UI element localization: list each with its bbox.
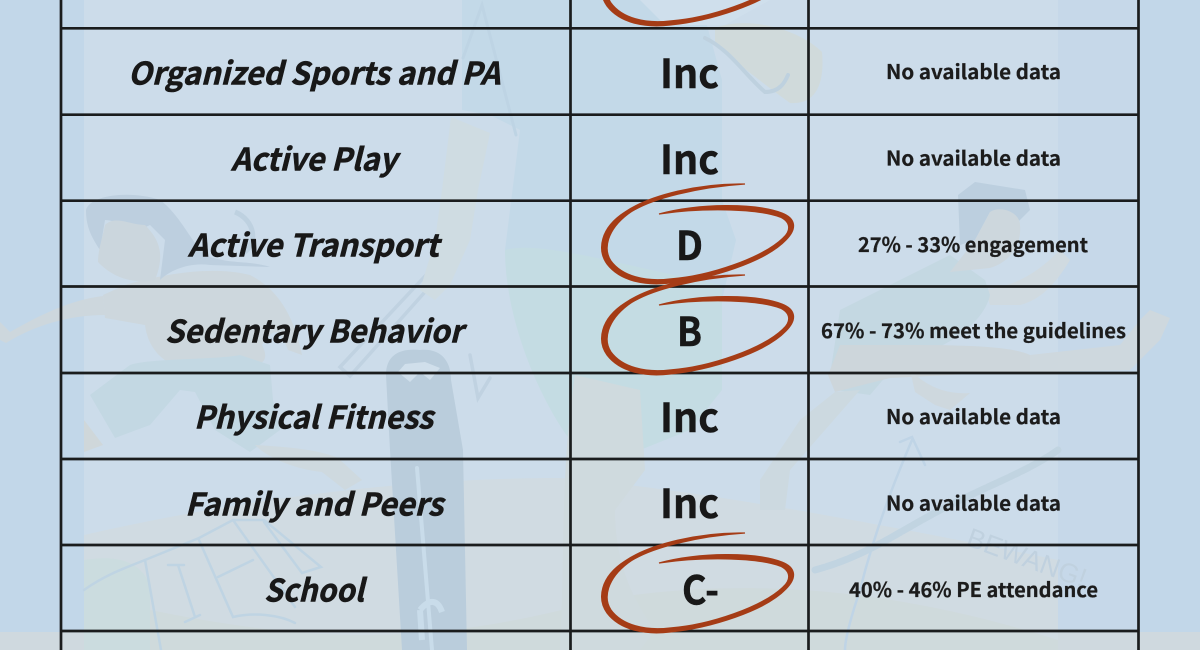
row: Active Play: No available data [886, 142, 1061, 172]
illustration: stumps [340, 258, 490, 398]
row: Family and Peers: Inc [660, 472, 719, 530]
row: Active Transport: D [676, 214, 703, 272]
illustration: centre player shoe [715, 23, 823, 103]
row: School: 40% - 46% PE attendance [849, 574, 1098, 603]
row: School: C- [682, 558, 719, 616]
illustration: centre player shirt [462, 0, 736, 320]
row: Family and Peers: Family and Peers [185, 480, 447, 524]
row: Active Transport [187, 184, 1089, 284]
grade circle: top row [602, 0, 794, 26]
row: School [264, 533, 1098, 633]
row: Active Transport: 27% - 33% engagement [858, 229, 1089, 258]
row: Organized Sports and PA: Inc [660, 42, 719, 100]
row: Physical Fitness: No available data [886, 401, 1061, 430]
row: Organized Sports and PA: Organized Sports and PA [128, 48, 500, 94]
row: Family and Peers [185, 472, 1061, 530]
row: Sedentary Behavior: B [677, 300, 702, 358]
illustration: centre player leg [560, 375, 655, 650]
illustration: right player [760, 182, 1170, 510]
illustration: ground hills [84, 478, 1058, 650]
illustration: cricket bat [386, 350, 467, 650]
illustration: arrow sketch [845, 437, 925, 650]
illustration: rope [815, 450, 1058, 570]
illustration: centre player arm [420, 117, 490, 300]
row: Active Transport: Active Transport [187, 220, 443, 266]
row: Organized Sports and PA [128, 42, 1061, 100]
illustration: hand-written word: BEWANG! [963, 522, 1091, 593]
row: Organized Sports and PA: No available data [886, 56, 1061, 85]
row: Physical Fitness [194, 386, 1061, 444]
background ground band [0, 632, 1200, 650]
illustration: shoulder lines [463, 5, 516, 135]
row: Family and Peers: No available data [886, 488, 1061, 516]
row: Active Play: Inc [660, 128, 719, 186]
illustration: left player [0, 195, 362, 490]
row: Sedentary Behavior [165, 275, 1126, 375]
row: Physical Fitness: Inc [660, 386, 719, 444]
grade circle: B [602, 275, 794, 375]
row: Physical Fitness: Physical Fitness [194, 392, 437, 438]
row: Active Play: Active Play [230, 134, 401, 180]
illustration: centre player shorts [505, 248, 722, 470]
illustration: centre player collar [640, 0, 770, 25]
right panel tint [1058, 0, 1139, 632]
row: Active Play [230, 128, 1061, 186]
row: Sedentary Behavior: Sedentary Behavior [165, 306, 467, 352]
grade circle: D [602, 184, 794, 284]
grade circle: C- [602, 533, 794, 633]
illustration: ladder lines [84, 520, 321, 650]
row: School: School [264, 566, 368, 610]
row: Sedentary Behavior: 67% - 73% meet the guidelines [821, 315, 1126, 344]
